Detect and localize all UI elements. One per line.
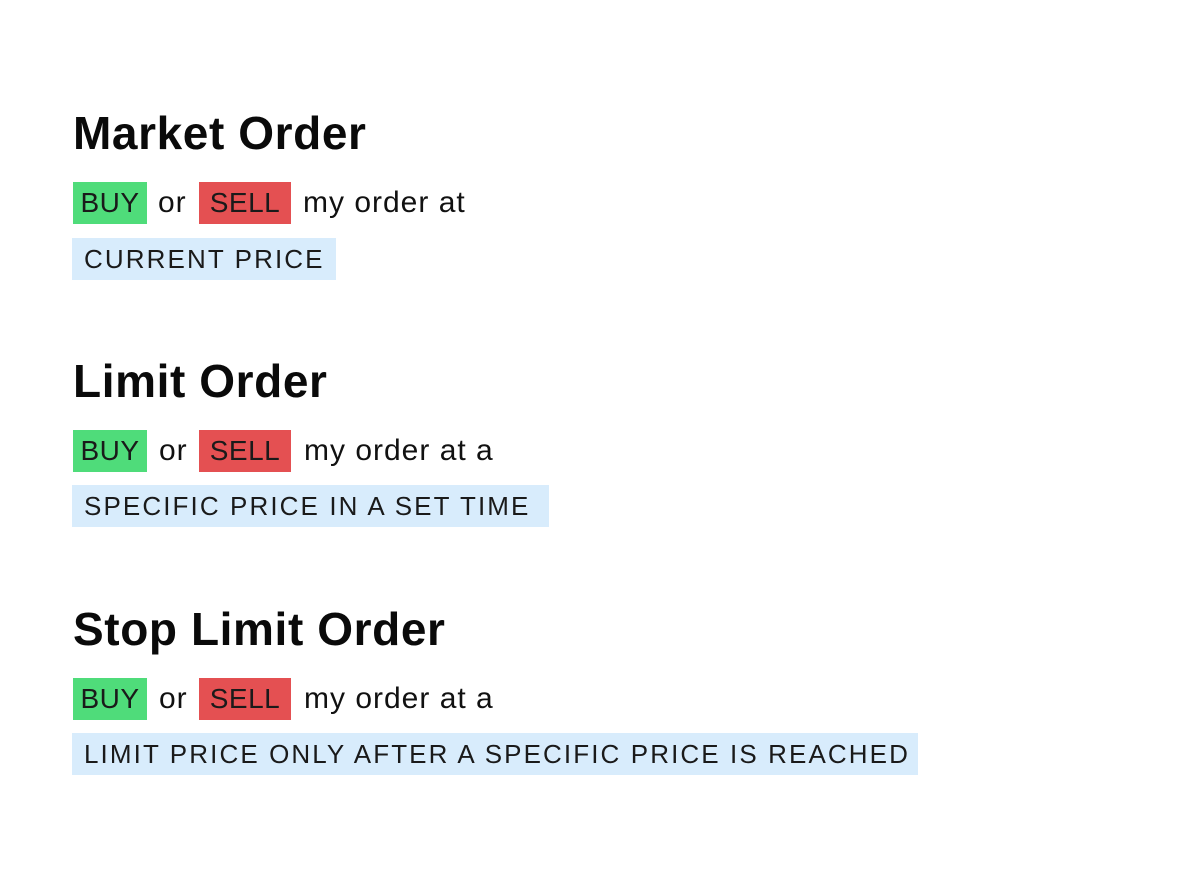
tag: sell: SELL (210, 187, 280, 218)
text: my order at a: my order at a (304, 434, 494, 467)
tag: buy (73, 678, 147, 720)
text: or: or (159, 434, 188, 467)
highlight: specific price: SPECIFIC PRICE IN A SET TIME (84, 491, 530, 521)
highlight: limit price (72, 733, 918, 775)
highlight: limit price: LIMIT PRICE ONLY AFTER A SPECIFIC PRICE IS REACHED (84, 739, 910, 769)
tag: sell (199, 182, 291, 224)
tag: buy: BUY (80, 187, 140, 218)
tag: buy: BUY (80, 683, 140, 714)
tag: sell (199, 678, 291, 720)
text: or: or (158, 186, 187, 219)
text: my order at a: my order at a (304, 682, 494, 715)
tag: sell: SELL (210, 683, 280, 714)
title: limit order: Limit Order (73, 355, 328, 407)
highlight: specific price (72, 485, 549, 527)
tag: sell (199, 430, 291, 472)
tag: buy (73, 430, 147, 472)
text: my order at: my order at (303, 186, 466, 219)
highlight: current price: CURRENT PRICE (84, 244, 325, 274)
text: or: or (159, 682, 188, 715)
tag: buy (73, 182, 147, 224)
title: market order: Market Order (73, 107, 367, 159)
tag: sell: SELL (210, 435, 280, 466)
highlight: current price (72, 238, 336, 280)
title: stop limit order: Stop Limit Order (73, 603, 446, 655)
tag: buy: BUY (80, 435, 140, 466)
